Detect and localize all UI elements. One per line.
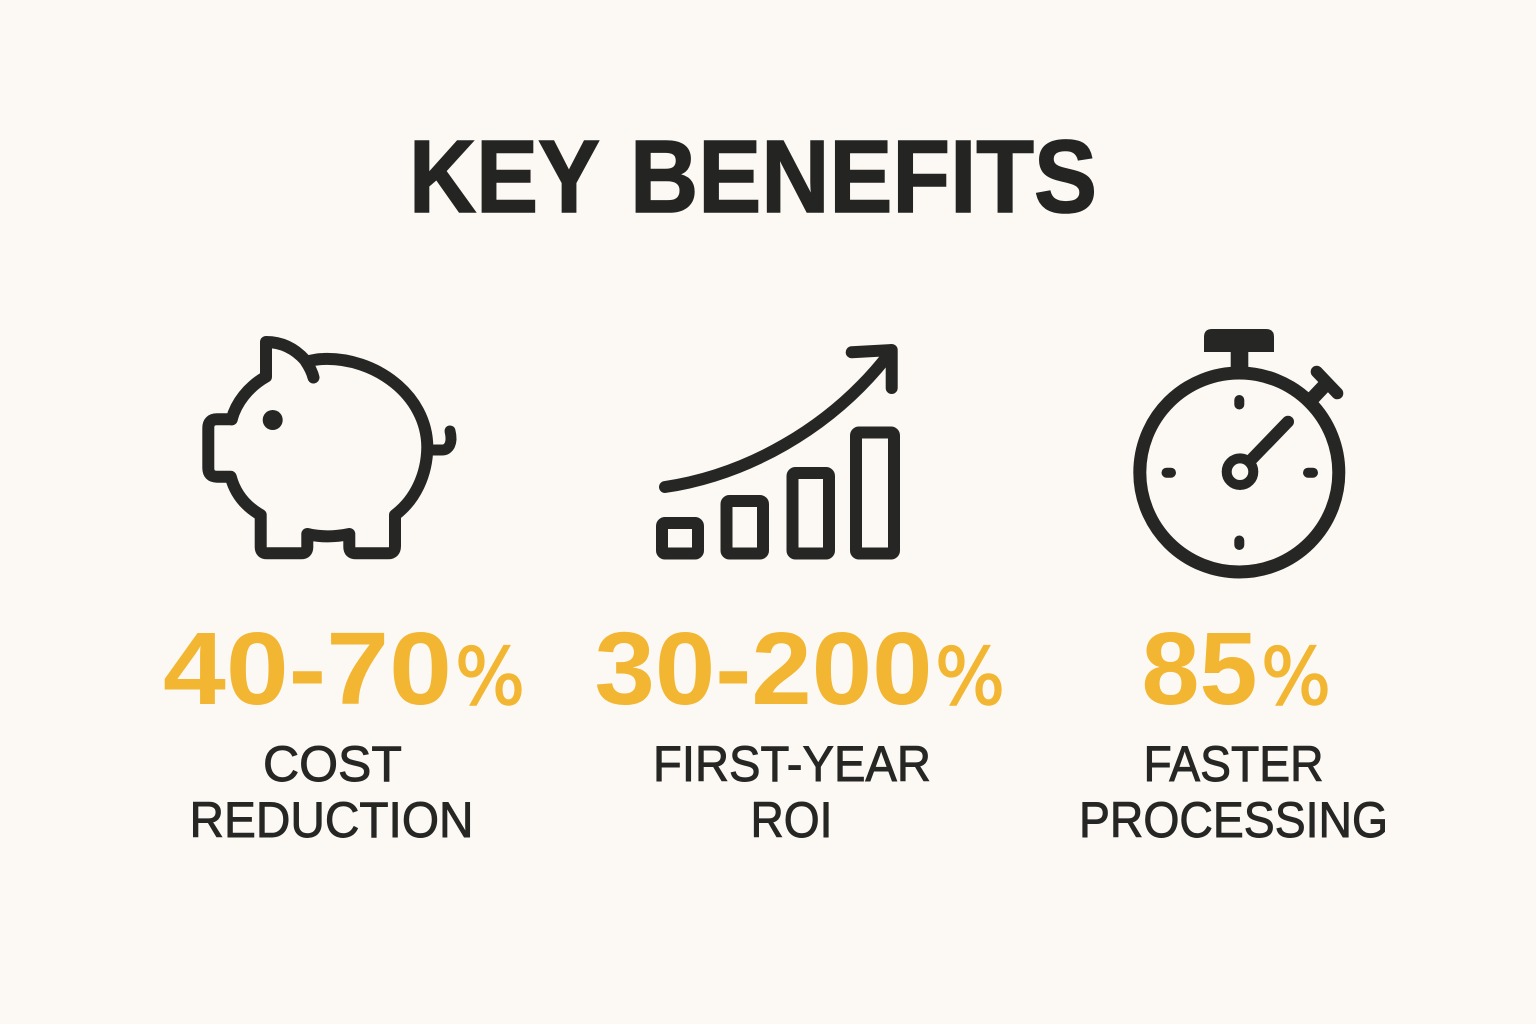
title [409, 119, 1097, 234]
icon: piggy bank [208, 342, 451, 553]
stat: 85 [1142, 611, 1258, 726]
icon: stopwatch [1140, 329, 1339, 572]
label: FIRST-YEAR [653, 736, 931, 792]
stat: % [455, 633, 525, 723]
stat: 30-200 [594, 611, 932, 726]
stat: 40-70 [163, 611, 452, 726]
label line 2: PROCESSING [1079, 792, 1388, 848]
panel: faster processing [1079, 329, 1388, 848]
icon: growth chart [662, 350, 894, 554]
title: KEY [409, 119, 600, 234]
panel: cost reduction [163, 342, 525, 848]
title: BENEFITS [630, 119, 1097, 234]
stat: % [1261, 633, 1331, 723]
panel: first-year ROI [594, 350, 1005, 848]
stat: % [935, 633, 1005, 723]
label: FASTER [1144, 736, 1324, 792]
label: COST [263, 736, 402, 792]
stat [1142, 611, 1331, 726]
label line 2: ROI [750, 792, 832, 848]
label line 2: REDUCTION [190, 792, 474, 848]
